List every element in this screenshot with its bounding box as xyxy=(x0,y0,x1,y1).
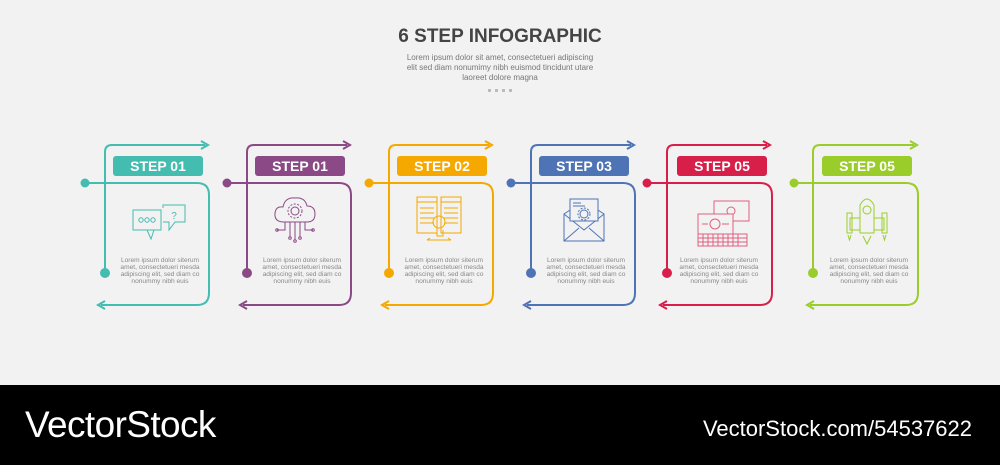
step 3 orange: Lorem ipsum dolor siterum xyxy=(405,257,484,264)
step 4 blue: Lorem ipsum dolor siterum xyxy=(547,257,626,264)
title: 6 STEP INFOGRAPHIC xyxy=(398,26,602,47)
subtitle: Lorem ipsum dolor sit amet, consectetueri adipiscing xyxy=(407,53,593,62)
subtitle xyxy=(407,53,594,82)
step 5 red: amet, consectetueri mesda xyxy=(679,264,759,271)
footer bar: VectorStock xyxy=(25,404,217,445)
subtitle: elit sed diam nonumimy nibh euismod tincidunt utare xyxy=(407,63,594,72)
step 5 red: adipiscing elit, sed diam co xyxy=(680,271,759,278)
step 4 blue xyxy=(508,141,635,309)
dots decoration xyxy=(488,89,512,92)
step 2 purple: nonummy nibh euis xyxy=(273,278,331,285)
step 1 teal: Lorem ipsum dolor siterum xyxy=(121,257,200,264)
step 5 red xyxy=(644,141,772,309)
step 3 orange: nonummy nibh euis xyxy=(415,278,473,285)
step 6 green xyxy=(790,141,918,309)
step 4 blue: nonummy nibh euis xyxy=(557,278,615,285)
footer bar: VectorStock.com/54537622 xyxy=(703,416,972,441)
step 1 teal: nonummy nibh euis xyxy=(131,278,189,285)
step 6 green: nonummy nibh euis xyxy=(840,278,898,285)
step 5 red: nonummy nibh euis xyxy=(690,278,748,285)
step 6 green: adipiscing elit, sed diam co xyxy=(830,271,909,278)
step 6 green: Lorem ipsum dolor siterum xyxy=(830,257,909,264)
step 1 teal xyxy=(82,141,209,309)
subtitle: laoreet dolore magna xyxy=(462,73,538,82)
step 5 red: Lorem ipsum dolor siterum xyxy=(680,257,759,264)
footer bar xyxy=(0,385,1000,465)
step 4 blue: amet, consectetueri mesda xyxy=(546,264,626,271)
step 2 purple: adipiscing elit, sed diam co xyxy=(263,271,342,278)
step 2 purple: STEP 01 xyxy=(272,158,328,174)
step 4 blue: adipiscing elit, sed diam co xyxy=(547,271,626,278)
step 5 red: STEP 05 xyxy=(694,158,750,174)
step 3 orange: STEP 02 xyxy=(414,158,470,174)
step 1 teal: STEP 01 xyxy=(130,158,186,174)
step 4 blue: STEP 03 xyxy=(556,158,612,174)
step 1 teal: ? xyxy=(171,211,177,222)
step 3 orange: adipiscing elit, sed diam co xyxy=(405,271,484,278)
step 2 purple: Lorem ipsum dolor siterum xyxy=(263,257,342,264)
step 6 green: amet, consectetueri mesda xyxy=(829,264,909,271)
step 6 green: STEP 05 xyxy=(839,158,895,174)
step 2 purple: amet, consectetueri mesda xyxy=(262,264,342,271)
step 1 teal: amet, consectetueri mesda xyxy=(120,264,200,271)
step 3 orange: amet, consectetueri mesda xyxy=(404,264,484,271)
step 2 purple xyxy=(224,141,351,309)
step 3 orange xyxy=(366,141,493,309)
step 1 teal: adipiscing elit, sed diam co xyxy=(121,271,200,278)
